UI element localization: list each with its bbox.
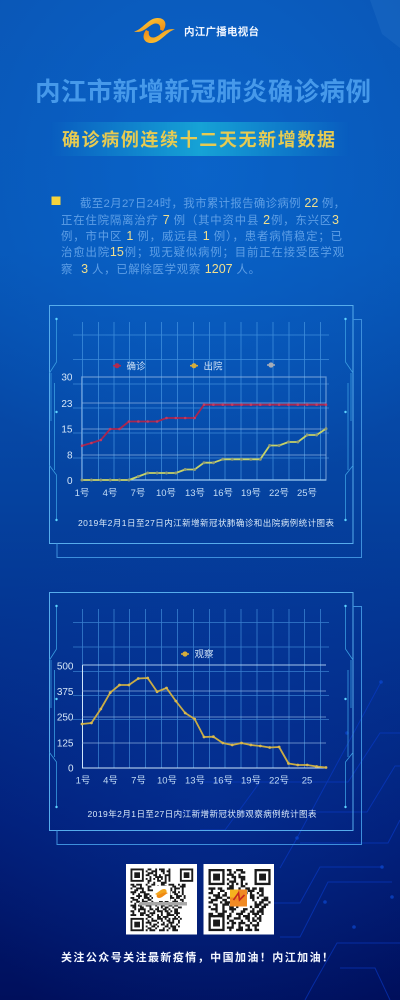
plot frame xyxy=(82,377,326,480)
y axis labels: 250 xyxy=(57,712,74,724)
y axis labels: 23 xyxy=(61,399,73,410)
panel frame xyxy=(50,306,362,558)
logo swoosh xyxy=(134,18,175,43)
y axis labels: 30 xyxy=(61,372,73,384)
QR center logo xyxy=(153,886,170,901)
legend: observation: 观察 xyxy=(194,648,214,660)
line: confirmed xyxy=(82,405,326,446)
line: discharged xyxy=(82,429,326,480)
title: 内江市新增新冠肺炎确诊病例 xyxy=(35,78,371,106)
legend: discharged xyxy=(190,360,223,372)
y axis labels xyxy=(61,372,73,487)
legend: confirmed: 确诊 xyxy=(126,360,146,372)
x axis labels: 10号 xyxy=(157,776,177,786)
text block: summary paragraph: 例，市中区 1 例，威远县 1 例），患者病情稳定；已 xyxy=(61,229,342,243)
logo text: 内江广播电视台 xyxy=(184,25,259,38)
y axis labels: 0 xyxy=(68,764,74,774)
QR code: left xyxy=(126,864,197,934)
x axis labels: 10号 xyxy=(156,488,176,499)
legend: discharged: 出院 xyxy=(204,360,223,372)
legend: observation xyxy=(181,648,214,660)
x axis labels: 13号 xyxy=(185,776,205,786)
x axis labels: 25 xyxy=(302,776,312,786)
logo xyxy=(134,18,259,43)
line: observation xyxy=(82,678,326,768)
x axis labels: 25号 xyxy=(297,488,317,499)
y axis labels: 375 xyxy=(57,687,74,698)
QR code: right xyxy=(204,864,274,934)
panel: confirmed and discharged chart xyxy=(50,306,362,558)
chart caption: 2019年2月1日至27日内江新增新冠状肺确诊和出院病例统计图表 xyxy=(78,518,334,528)
band background xyxy=(50,122,350,156)
x axis labels: 22号 xyxy=(269,776,289,786)
x axis labels: 16号 xyxy=(213,776,233,786)
y axis labels: 8 xyxy=(67,450,73,462)
x axis labels: 22号 xyxy=(269,488,289,499)
x axis labels: 1号 xyxy=(75,488,89,499)
x axis labels xyxy=(76,776,312,786)
top-right light streak xyxy=(370,0,400,48)
x axis labels: 16号 xyxy=(213,488,233,499)
legend: confirmed xyxy=(113,360,146,372)
panel: observation chart xyxy=(50,592,362,844)
x axis labels: 4号 xyxy=(103,776,118,786)
text block: summary paragraph: 察 3 人，已解除医学观察 1207 人。 xyxy=(61,262,260,276)
x axis labels: 19号 xyxy=(241,776,261,786)
x axis labels: 13号 xyxy=(185,488,205,499)
legend: unnamed series xyxy=(267,362,275,368)
y axis labels: 15 xyxy=(61,424,73,436)
QR center logo xyxy=(230,890,247,906)
text block: summary paragraph: 截至2月27日24时，我市累计报告确诊病例 22 例， xyxy=(80,196,345,210)
x axis labels: 1号 xyxy=(76,776,90,786)
y axis labels xyxy=(57,662,74,774)
plot axes xyxy=(82,665,326,768)
bullet square xyxy=(52,196,60,205)
bottom slogan: 关注公众号关注最新疫情，中国加油！内江加油！ xyxy=(61,950,333,964)
y axis labels: 500 xyxy=(57,662,74,672)
panel frame xyxy=(50,592,362,844)
legend xyxy=(113,360,275,372)
y axis labels: 125 xyxy=(57,738,74,750)
text block: summary paragraph: 正在住院隔离治疗 7 例（其中资中县 2例，东兴区3 xyxy=(61,212,339,226)
subtitle text: 确诊病例连续十二天无新增数据 xyxy=(62,129,335,150)
x axis labels xyxy=(75,488,317,499)
x axis labels: 4号 xyxy=(103,488,117,499)
QR caption strip xyxy=(139,902,187,906)
x axis labels: 19号 xyxy=(241,488,261,499)
text block: summary paragraph xyxy=(61,196,345,276)
x axis labels: 7号 xyxy=(131,776,146,786)
chart caption: 2019年2月1日至27日内江新增新冠状肺观察病例统计图表 xyxy=(88,809,317,819)
y axis labels: 0 xyxy=(67,476,73,487)
text block: summary paragraph: 治愈出院15例；现无疑似病例；目前正在接受医学观 xyxy=(61,245,344,259)
subtitle band xyxy=(50,122,350,156)
x axis labels: 7号 xyxy=(131,488,145,499)
